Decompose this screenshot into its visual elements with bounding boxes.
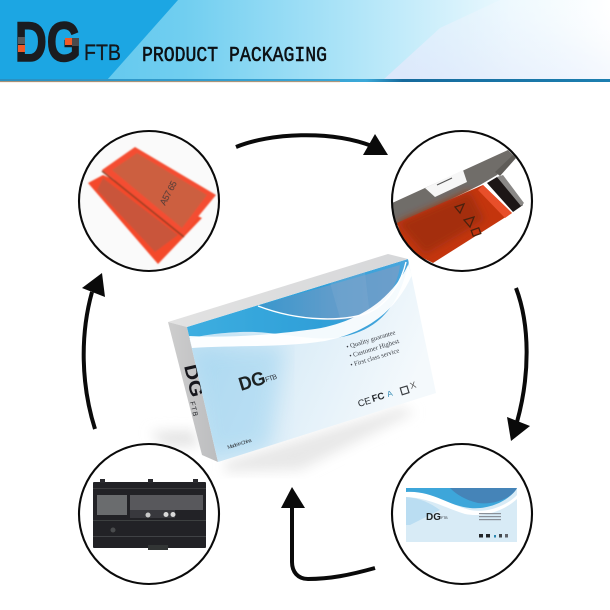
box logo: FTB (265, 374, 278, 384)
box certification marks (357, 380, 417, 410)
arrow: top (236, 134, 388, 155)
arrow: left (82, 273, 105, 429)
grey cardboard edge (390, 150, 515, 226)
box side face (168, 322, 218, 462)
box shadow (150, 408, 415, 472)
lower bag (88, 175, 202, 264)
circle: flat box front: FTB (441, 516, 448, 520)
upper bag (101, 146, 217, 218)
box feature list: • Customer Highest (349, 338, 400, 360)
box side face: FTB (188, 401, 198, 417)
box certification marks: FC (371, 391, 386, 405)
circle: red anti-static bags: A57 65 (158, 179, 179, 207)
box side face: DG (179, 362, 207, 399)
header logo: DG (15, 10, 81, 73)
white tab (425, 170, 467, 197)
battery label (97, 495, 127, 515)
box certification marks: X (409, 380, 417, 391)
made in china note: Made in China (227, 438, 253, 451)
arrow: bottom (281, 487, 375, 579)
circle: red anti-static bags (79, 131, 219, 271)
arrow: right (507, 288, 530, 441)
header banner (0, 0, 610, 82)
box feature list: • First class service (350, 347, 400, 369)
red bag (397, 185, 512, 263)
box feature list: • Quality guarantee (346, 329, 396, 351)
box feature list (346, 329, 400, 369)
box front face (187, 259, 436, 462)
central product box (168, 254, 436, 462)
box top face (168, 254, 408, 327)
box logo: DG (236, 368, 268, 396)
circle: flat box front (392, 444, 532, 584)
circle: laptop battery (79, 444, 219, 584)
circle: bag inside box (390, 131, 532, 271)
box certification marks: CE (357, 395, 373, 410)
box certification marks: A (386, 389, 394, 399)
header title: PRODUCT PACKAGING (142, 43, 327, 68)
circle: flat box front: DG (426, 512, 441, 523)
header logo: FTB (84, 40, 121, 65)
